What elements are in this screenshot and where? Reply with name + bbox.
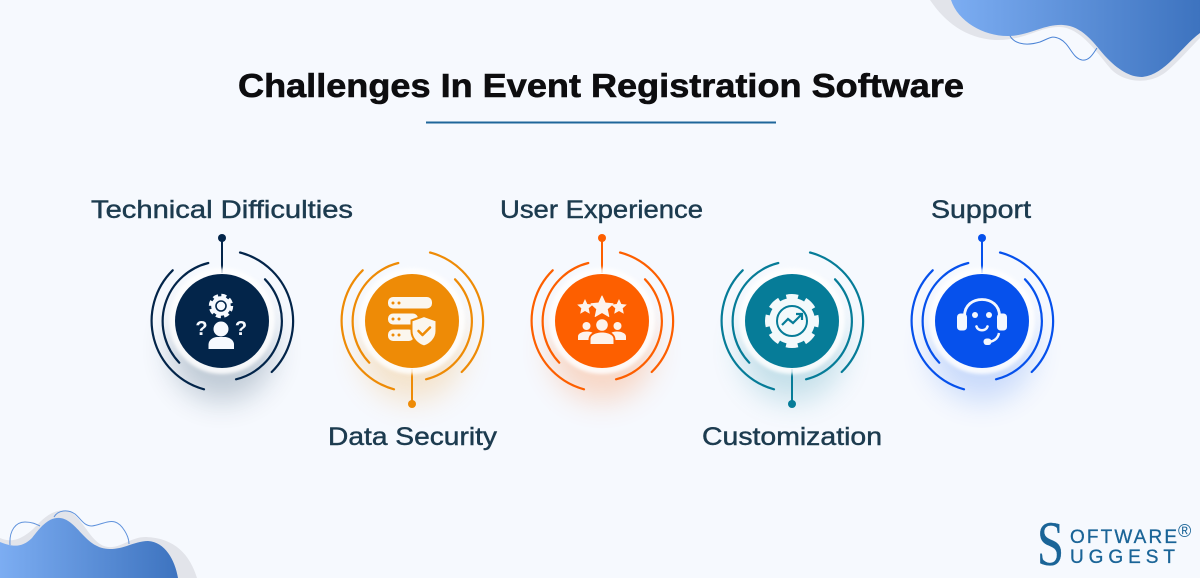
icon: person with gear and question marks: ? [235, 318, 247, 340]
badge: orange [342, 252, 483, 408]
logo: SoftwareSuggest: ® [1178, 521, 1191, 541]
label: Data Security: Data Security [328, 423, 498, 451]
label: User Experience: User Experience [500, 196, 703, 224]
icon: stars and people [577, 296, 627, 344]
label: Technical Difficulties: Technical Difficulties [91, 196, 353, 224]
item: Customization [702, 252, 882, 451]
item: Data Security [328, 252, 498, 451]
badge: red-orange [532, 234, 673, 401]
badge: blue [912, 234, 1053, 401]
icon: gear with growth arrow [768, 297, 816, 345]
badge: navy [152, 234, 293, 401]
label: Customization: Customization [702, 423, 882, 451]
title: Challenges In Event Registration Software [238, 67, 964, 104]
logo: SoftwareSuggest: S [1037, 508, 1064, 578]
title underline [426, 122, 776, 124]
logo: SoftwareSuggest: OFTWARE [1070, 527, 1177, 548]
item: Support [912, 196, 1053, 401]
logo: SoftwareSuggest: UGGEST [1070, 547, 1175, 568]
item: Technical Difficulties [91, 196, 353, 401]
icon: person with gear and question marks: ? [195, 318, 208, 340]
icon: headset agent [957, 300, 1007, 345]
decorative blob: top right [930, 0, 1200, 81]
item: User Experience [500, 196, 703, 401]
badge: teal [722, 252, 863, 408]
logo: SoftwareSuggest [1037, 508, 1191, 578]
icon: person with gear and question marks [195, 296, 247, 349]
icon: server with shield [388, 297, 436, 346]
label: Support: Support [931, 196, 1031, 224]
decorative blob: bottom left [0, 510, 197, 578]
